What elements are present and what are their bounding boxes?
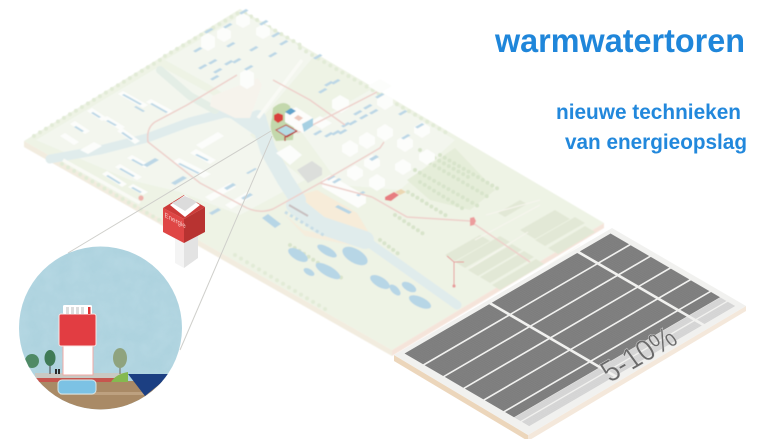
- river basin: [295, 205, 365, 240]
- callout lines: [68, 131, 272, 350]
- solar fields: [262, 205, 433, 312]
- map ground: [24, 9, 604, 350]
- red heat network lines: [148, 75, 530, 262]
- main river: [258, 118, 298, 200]
- tower tank: [59, 314, 96, 346]
- farm building: [385, 192, 399, 201]
- farm fields: [445, 200, 595, 290]
- tree centre: [44, 350, 56, 374]
- map slab edge left: [24, 141, 392, 356]
- tree edge dots: [34, 12, 450, 312]
- solar ellipse 7: [388, 283, 402, 297]
- dark panels: [405, 234, 720, 417]
- plot side left: [394, 355, 528, 439]
- left callout line: [68, 131, 271, 253]
- solar ellipse 6: [368, 272, 392, 292]
- map slab edge right: [392, 223, 604, 356]
- green blob: [271, 103, 294, 141]
- red top: [163, 195, 205, 219]
- west canal: [50, 113, 262, 159]
- percentage label: 5-10%: [594, 320, 684, 389]
- red right face: [184, 207, 205, 243]
- waterways: [50, 70, 457, 305]
- tree left: [25, 354, 39, 368]
- white row blocks, west: [60, 91, 253, 209]
- white buildings: [201, 13, 435, 208]
- red strip: [36, 378, 114, 382]
- farm shed: [395, 189, 406, 195]
- isometric city map: [24, 9, 604, 356]
- forest park: [407, 148, 495, 210]
- solar ellipse 8: [400, 280, 418, 294]
- blue roofs, along v: [74, 94, 209, 193]
- central tower complex: [271, 103, 313, 141]
- column right face: [184, 232, 198, 268]
- red marker tower: [274, 113, 283, 123]
- tower label: Energie: [164, 212, 186, 230]
- gray roof top: [172, 196, 197, 211]
- water dots: [285, 212, 325, 236]
- pavement: [35, 373, 127, 378]
- trunk: [50, 366, 51, 374]
- title: warmwatertoren: [494, 22, 745, 59]
- wind turbine: [447, 256, 464, 286]
- top slats: [66, 307, 84, 314]
- white roof: [170, 195, 200, 217]
- large white building: [285, 107, 313, 133]
- pink marker: [470, 217, 476, 226]
- pink roof: [294, 115, 303, 121]
- solar ellipse 2: [315, 242, 339, 260]
- column left face: [175, 235, 184, 268]
- lower river: [365, 240, 457, 305]
- pool outline: [276, 125, 297, 137]
- zoom circle: water tower section: [19, 246, 183, 411]
- tree right: [113, 348, 127, 374]
- plot top: [394, 228, 746, 435]
- blue block on sand: [335, 205, 352, 214]
- red slat: [88, 307, 90, 314]
- plaza: [210, 78, 262, 118]
- solar panel plot: [394, 228, 746, 439]
- crown: [113, 348, 127, 368]
- light road: [63, 60, 302, 203]
- people: [55, 369, 60, 374]
- solar rows: [405, 234, 735, 426]
- blue roof: [285, 108, 296, 115]
- solar ellipse 3: [339, 243, 371, 269]
- trunk: [120, 368, 121, 374]
- sky: [19, 246, 183, 410]
- ship block: [262, 214, 281, 228]
- right callout line: [180, 136, 272, 350]
- plot side right: [528, 306, 746, 439]
- isometric energy tower: [163, 195, 205, 268]
- tank top: [63, 305, 92, 314]
- underground storage: [58, 380, 96, 394]
- solar ellipse 5: [302, 266, 316, 278]
- sand beach: [300, 190, 372, 238]
- light panels: [514, 297, 735, 426]
- red left face: [163, 208, 184, 243]
- boat: [289, 205, 308, 216]
- sky texture: [19, 246, 183, 410]
- field paths: [470, 200, 580, 300]
- blue side: [302, 118, 313, 132]
- harbour water: [128, 374, 172, 396]
- lower sand strip: [283, 213, 370, 245]
- solar ellipse 4: [313, 260, 343, 282]
- ground band: [60, 392, 160, 395]
- turbine base: [452, 284, 456, 288]
- solar ellipse 1: [286, 245, 310, 265]
- dark lot: [297, 161, 322, 183]
- solar ellipse 9: [407, 292, 433, 312]
- subtitle line 1: nieuwe technieken: [556, 101, 741, 124]
- small red marker: [138, 195, 144, 201]
- grass mound: [111, 372, 128, 382]
- north branch: [160, 70, 215, 110]
- tower column: [63, 345, 93, 375]
- ground: [38, 381, 162, 410]
- crown: [44, 350, 56, 366]
- blue roofs, along u: [143, 9, 424, 215]
- forest tree dots: [290, 150, 500, 280]
- city district ground: [36, 14, 455, 215]
- junction water: [212, 105, 262, 140]
- red wall: [285, 131, 297, 141]
- subtitle line 2: van energieopslag: [565, 131, 747, 154]
